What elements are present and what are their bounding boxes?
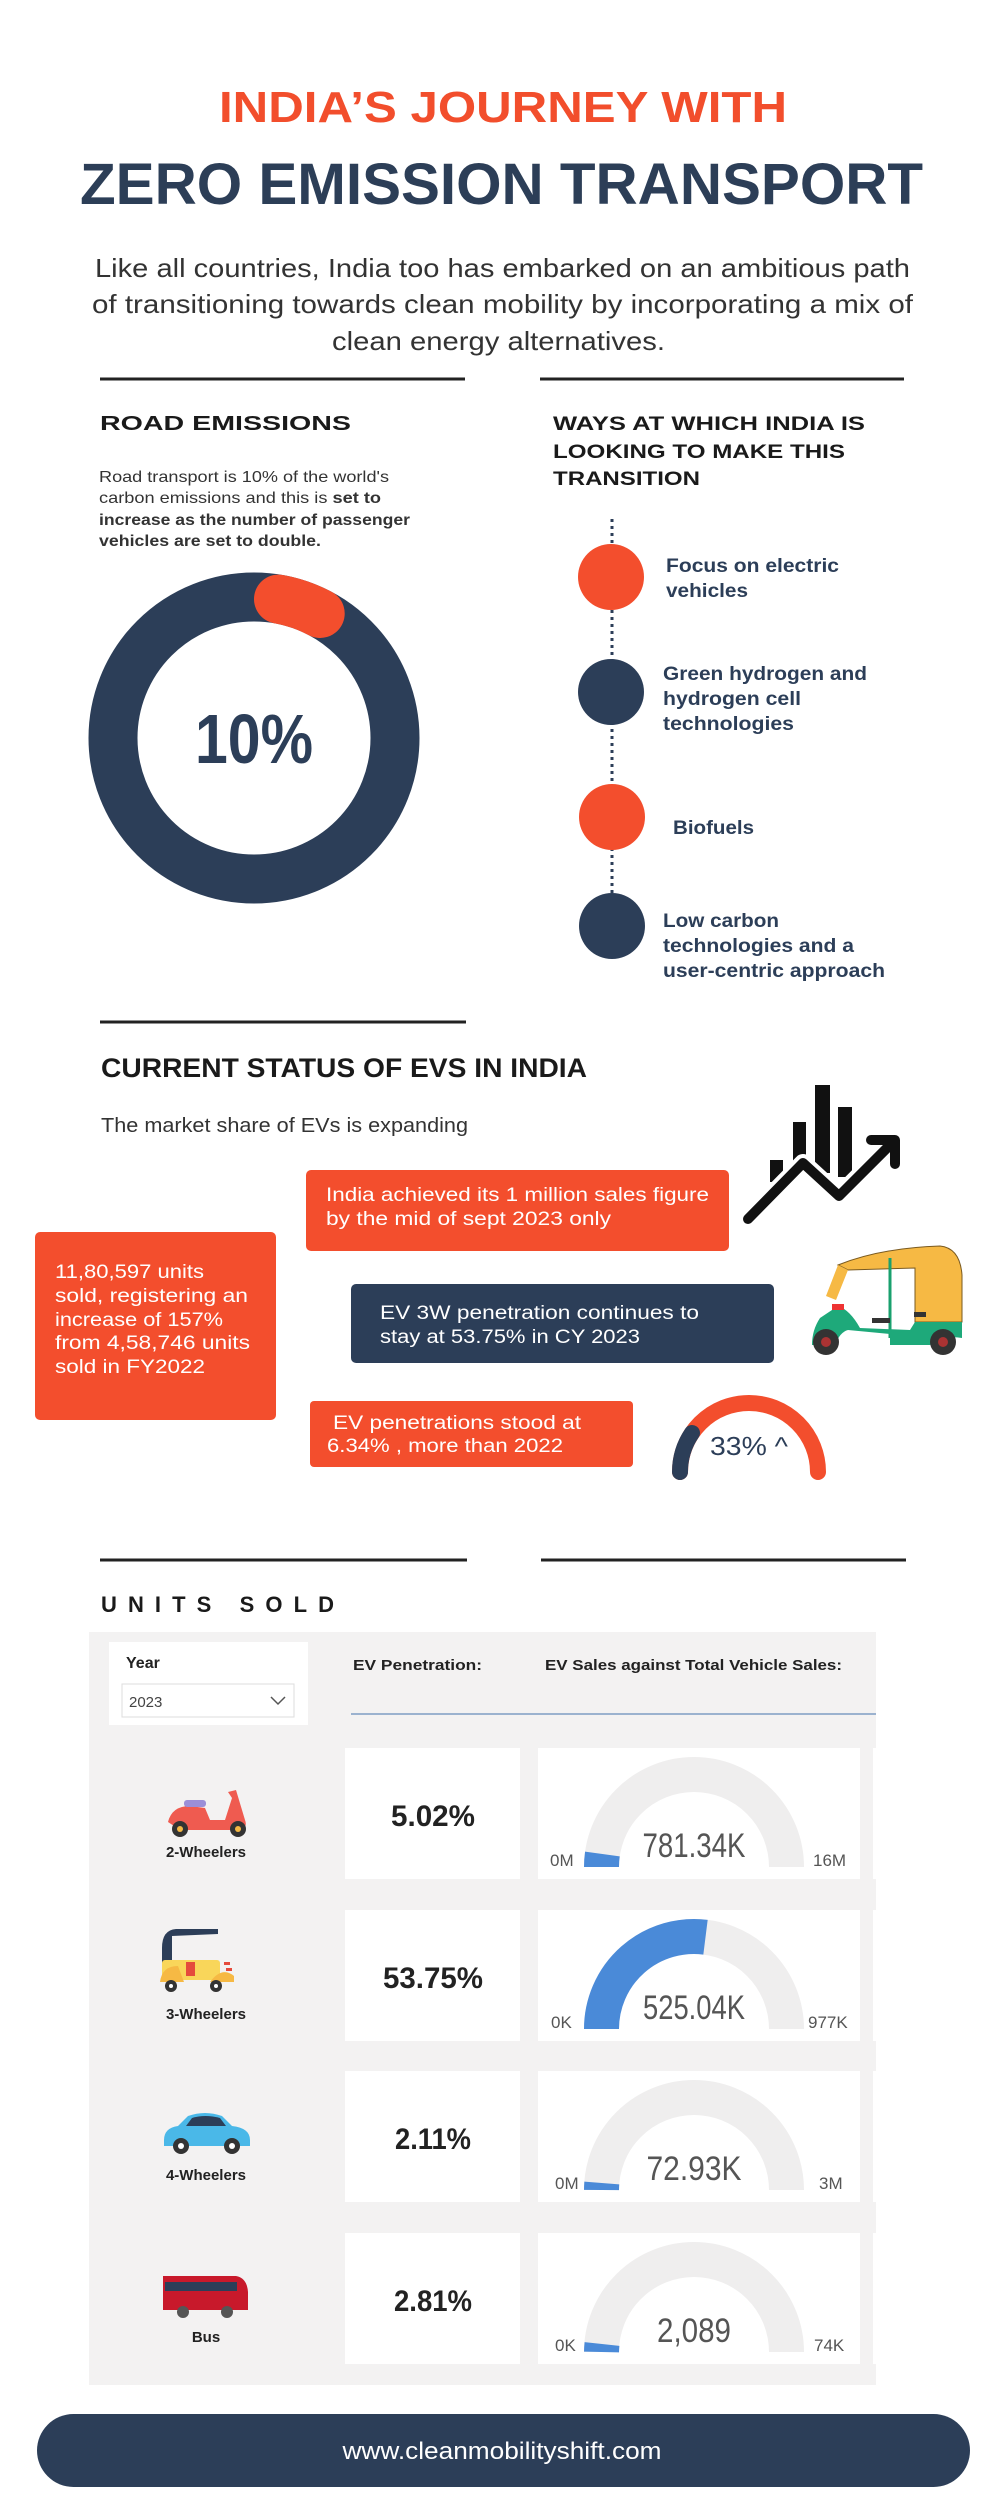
panel: dashboard xyxy=(89,1632,876,2385)
year filter: Year xyxy=(126,1655,160,1672)
text block: road emissions: vehicles are set to double. xyxy=(99,533,321,550)
icon: auto rickshaw xyxy=(812,1246,962,1355)
intro paragraph xyxy=(92,253,914,356)
row: 4-wheelers: 72.93K xyxy=(646,2150,742,2188)
heading: ways: LOOKING TO MAKE THIS xyxy=(553,442,845,463)
title xyxy=(80,83,923,217)
text block: road emissions xyxy=(99,469,410,550)
column headers: EV Sales against Total Vehicle Sales: xyxy=(545,1657,842,1674)
timeline: user-centric approach xyxy=(663,961,885,982)
panel: road emissions xyxy=(99,413,410,879)
icon: growth chart xyxy=(748,1085,895,1219)
callout: units sold: 11,80,597 units xyxy=(55,1262,204,1283)
row: 2-wheelers: 2-Wheelers xyxy=(166,1844,246,1861)
callout: units sold: increase of 157% xyxy=(55,1310,223,1331)
timeline: vehicles xyxy=(666,581,748,602)
row: 4-wheelers: 2.11% xyxy=(395,2123,471,2156)
title: INDIA’S JOURNEY WITH xyxy=(219,83,787,132)
text block: road emissions: increase as the number of passenger xyxy=(99,512,410,529)
subtitle: The market share of EVs is expanding xyxy=(101,1115,468,1137)
intro paragraph: of transitioning towards clean mobility by incorporating a mix of xyxy=(92,289,914,319)
callout: units sold: sold in FY2022 xyxy=(55,1357,205,1378)
callout: 1 million sales xyxy=(306,1170,729,1251)
row: 2-wheelers: 5.02% xyxy=(391,1800,475,1833)
callout: 3W penetration xyxy=(351,1284,774,1363)
row: 3-wheelers: 525.04K xyxy=(643,1989,745,2027)
heading: road emissions: ROAD EMISSIONS xyxy=(100,413,351,435)
column headers: EV Penetration: xyxy=(353,1657,482,1674)
donut chart: 10% xyxy=(195,700,313,778)
timeline: Low carbon xyxy=(663,911,779,932)
row: 3-wheelers: 0K xyxy=(551,2013,572,2032)
callout: units sold: sold, registering an xyxy=(55,1286,248,1307)
row: 2-wheelers: 781.34K xyxy=(642,1827,746,1865)
timeline: hydrogen cell xyxy=(663,689,801,710)
callout: units sold xyxy=(35,1232,276,1420)
callout: 3W penetration: stay at 53.75% in CY 2023 xyxy=(380,1327,640,1348)
heading: ways: WAYS AT WHICH INDIA IS xyxy=(553,414,865,435)
heading: current status: CURRENT STATUS OF EVS IN INDIA xyxy=(101,1053,587,1083)
row: 3-wheelers: 977K xyxy=(808,2013,848,2032)
icon: bus xyxy=(163,2276,248,2318)
icon: 3-wheeler xyxy=(160,1929,234,1992)
row: 4-wheelers: 4-Wheelers xyxy=(166,2167,246,2184)
row: bus: Bus xyxy=(192,2329,220,2346)
timeline: technologies and a xyxy=(663,936,854,957)
intro paragraph: clean energy alternatives. xyxy=(332,326,665,356)
footer: www.cleanmobilityshift.com xyxy=(341,2438,662,2465)
row: bus: 74K xyxy=(814,2336,845,2355)
column headers xyxy=(353,1657,842,1674)
row: 4-wheelers xyxy=(164,2071,876,2202)
heading: ways xyxy=(553,414,865,490)
row: 4-wheelers: 0M xyxy=(555,2174,579,2193)
footer xyxy=(37,2414,970,2487)
text block: road emissions: carbon emissions and this is set to xyxy=(99,490,381,507)
icon: car xyxy=(164,2113,250,2154)
row: 2-wheelers: 0M xyxy=(550,1851,574,1870)
year filter: 2023 xyxy=(129,1694,162,1711)
timeline: Focus on electric xyxy=(666,556,839,577)
icon: scooter xyxy=(168,1790,246,1837)
callout: 3W penetration: EV 3W penetration continues to xyxy=(380,1303,699,1324)
heading: ways: TRANSITION xyxy=(553,469,700,490)
callout: EV penetration: 6.34% , more than 2022 xyxy=(327,1436,563,1457)
row: 2-wheelers xyxy=(166,1748,876,1879)
intro paragraph: Like all countries, India too has embarked on an ambitious path xyxy=(95,253,910,283)
row: bus: 2.81% xyxy=(394,2285,472,2318)
timeline xyxy=(578,519,885,982)
gauge: 33% xyxy=(680,1403,818,1472)
row: 3-wheelers xyxy=(160,1910,876,2041)
timeline: Green hydrogen and xyxy=(663,664,867,685)
text block: road emissions: Road transport is 10% of the world's xyxy=(99,469,389,486)
timeline: Biofuels xyxy=(673,818,754,839)
row: bus xyxy=(163,2233,876,2364)
callout: EV penetration: EV penetrations stood at xyxy=(333,1413,582,1434)
callout: units sold: from 4,58,746 units xyxy=(55,1333,250,1354)
row: 2-wheelers: 16M xyxy=(813,1851,846,1870)
heading: units sold: UNITS SOLD xyxy=(101,1592,334,1617)
panel: current status xyxy=(35,1053,962,1472)
row: 4-wheelers: 3M xyxy=(819,2174,843,2193)
panel: ways of transition xyxy=(553,414,885,982)
callout: 1 million sales: by the mid of sept 2023 only xyxy=(326,1209,612,1230)
donut chart xyxy=(113,597,395,879)
gauge: 33%: 33% ^ xyxy=(710,1431,789,1461)
year filter xyxy=(109,1642,308,1725)
row: bus: 2,089 xyxy=(657,2312,731,2350)
row: bus: 0K xyxy=(555,2336,576,2355)
callout: 1 million sales: India achieved its 1 million sales figure xyxy=(326,1185,709,1206)
timeline: technologies xyxy=(663,714,794,735)
title: ZERO EMISSION TRANSPORT xyxy=(80,152,923,217)
callout: EV penetration xyxy=(310,1401,633,1467)
row: 3-wheelers: 3-Wheelers xyxy=(166,2006,246,2023)
row: 3-wheelers: 53.75% xyxy=(383,1962,483,1995)
